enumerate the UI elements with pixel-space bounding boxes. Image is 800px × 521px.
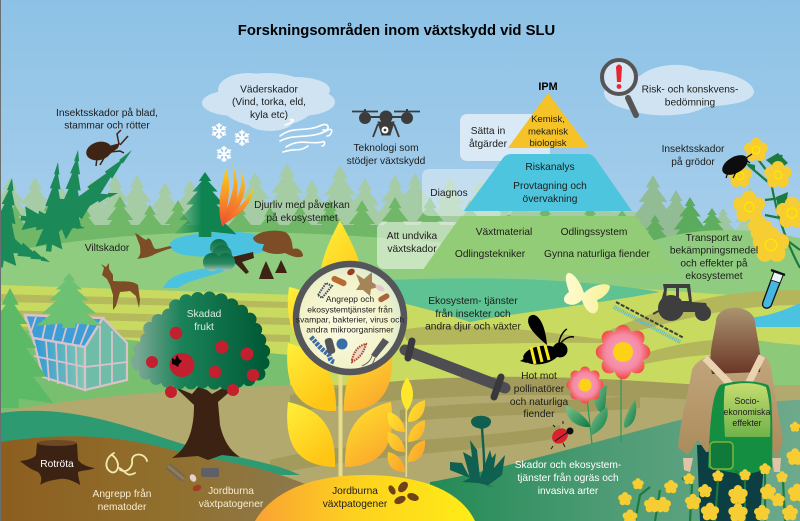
label: risk assessment: bedömning [665,98,716,108]
panel: prevention tag [377,222,467,269]
label: plant material: Växtmaterial [476,227,532,238]
backpack [708,381,772,475]
label: leaf insect damage: Insektsskador på blad, [56,108,158,119]
title: Forskningsområden inom växtskydd vid SLU [238,23,555,39]
label: diagnosis: Diagnos [430,188,468,199]
stump [20,440,95,485]
icon: drone [352,109,420,137]
pyramid bottom: prevention [420,216,678,274]
lens [296,264,404,372]
icon: snowflakes [212,123,249,162]
label: chemical mechanical biological: Kemisk, [531,114,565,125]
icon: wind [280,119,332,152]
label: microorganisms: Angrepp och [326,294,374,304]
ladybug [549,421,574,449]
rapeseed branch [728,138,800,268]
dandelion [450,416,505,487]
soil [0,436,345,521]
left spruce branches [0,141,141,273]
left green curve [0,411,300,475]
fire flames [219,162,254,226]
pyramid middle: analysis [464,154,632,211]
pyramid top: chemical [508,93,589,148]
label: technology: stödjer växtskydd [347,156,426,167]
label: soil pathogens left: växtpatogener [199,499,264,510]
label: socioeconomic: effekter [732,418,762,428]
icon: risk magnifier [602,60,636,115]
label: pesticide transport: ekosystemet [685,271,743,282]
label: weeds: Skador och ekosystem- [515,460,621,471]
river and pond [163,232,800,327]
wheat: small plant [388,377,425,477]
rapeseed bottom [618,422,800,521]
label: pesticide transport: och effekter på [680,258,748,270]
label: wildlife: på ekosystemet [266,212,338,224]
mid forest [0,196,736,285]
label: sampling and monitoring: övervakning [523,194,578,205]
label: weeds: tjänster från ogräs och [517,472,619,484]
label: crop insect damage: Insektsskador [662,144,724,155]
label: risk analysis: Riskanalys [525,162,575,173]
label: natural enemies: Gynna naturliga fiender [544,249,651,260]
label: weather damage: (Vind, torka, eld, [232,97,306,108]
icon: black beetle [719,151,752,179]
label: take action: åtgärder [469,138,508,150]
label: pesticide transport: Transport av [686,233,742,244]
label: pollinator threat: fiender [523,409,555,420]
label: pesticide transport: bekämpningsmedel [670,246,758,256]
label: soil pathogens centre: växtpatogener [323,499,388,510]
flowers [566,325,650,444]
apple tree [138,298,264,460]
icon: nematodes [106,453,147,475]
hair [711,308,761,374]
label: take action: Sätta in [471,126,505,137]
label: game damage: Viltskador [85,243,130,254]
microorganisms [311,267,390,371]
label: nematodes: Angrepp från [93,489,151,500]
label: microorganisms: ekosystemtjänster från [307,304,393,314]
label: pollinator threat: Hot mot [521,371,557,382]
label: root rot: Rotröta [40,459,74,470]
label: soil pathogens centre: Jordburna [332,486,378,497]
damage spot [172,355,182,367]
icon: seeds [387,480,420,506]
label: weeds: invasiva arter [538,486,599,497]
label: leaf insect damage: stammar och rötter [64,120,150,132]
backpack panel [724,383,770,437]
butterfly [564,273,610,313]
left edge line [0,0,1,521]
label: weather damage: Väderskador [240,84,298,96]
label: avoid damage: växtskador [387,244,437,255]
icon: soil pathogens [168,466,219,492]
island with bush and logs [203,239,254,274]
tree trunk [172,384,240,460]
IPM pyramid [420,93,678,274]
panel: diagnosis tag [422,169,512,216]
label: chemical mechanical biological: mekanisk [528,126,568,138]
label: sampling and monitoring: Provtagning och [513,181,587,192]
dark fir behind the fire [174,172,236,237]
label: socioeconomic: ekonomiska [724,407,771,417]
far forest [0,163,774,272]
bee [520,315,574,367]
hands [683,458,781,472]
backpack straps [705,356,762,384]
greenhouse [25,315,127,390]
label: microorganisms: andra mikroorganismer [306,324,394,334]
tractor and sprayer [614,284,711,342]
label: crop insect damage: på grödor [671,156,715,168]
label: wildlife: Djurliv med påverkan [254,200,350,211]
backpack pocket [710,442,733,469]
label: technology: Teknologi som [353,143,419,154]
label: IPM: IPM [538,81,558,93]
label: chemical mechanical biological: biologisk [530,138,567,149]
icon: test tube [763,270,785,308]
legs [697,445,765,521]
deer [101,263,140,310]
wildlife: goose [135,233,172,259]
yellow mound [255,475,475,521]
label: pollinator threat: pollinatörer [514,384,565,395]
label: ecosystem services: från insekter och [435,308,511,320]
weather cloud [202,73,335,131]
label: risk assessment: Risk- och konskvens- [642,84,738,96]
label: pollinator threat: och naturliga [510,397,568,408]
label: ecosystem services: Ekosystem- tjänster [428,296,518,307]
label: damaged fruit: frukt [194,322,214,333]
icon: weevil on spruce [84,130,128,166]
label: nematodes: nematoder [98,502,147,513]
person [678,308,783,521]
light green hill [0,230,800,310]
label: cultivation systems: Odlingssystem [561,227,627,238]
farmland fields [0,278,800,521]
left firs [0,273,102,408]
wildlife: beaver [253,231,303,257]
felled stumps [259,260,287,279]
jacket [678,354,783,460]
magnifier handle [405,341,505,397]
label: avoid damage: Att undvika [387,231,437,242]
label: cultivation techniques: Odlingstekniker [455,249,526,260]
tree crown [138,298,264,383]
apples [146,327,259,398]
right foreground hill [430,400,800,521]
label: weather damage: kyla etc) [250,110,288,121]
label: ecosystem services: andra djur och växter [425,322,521,332]
label: soil pathogens left: Jordburna [208,486,254,497]
wheat: large plant [287,220,392,480]
panel: action tag [460,114,550,161]
risk cloud [604,65,754,115]
label: socioeconomic: Socio- [735,396,759,406]
label: microorganisms: svampar, bakterier, virus och [296,314,404,324]
lens magnifier [296,264,505,397]
label: damaged fruit: Skadad [187,309,221,320]
